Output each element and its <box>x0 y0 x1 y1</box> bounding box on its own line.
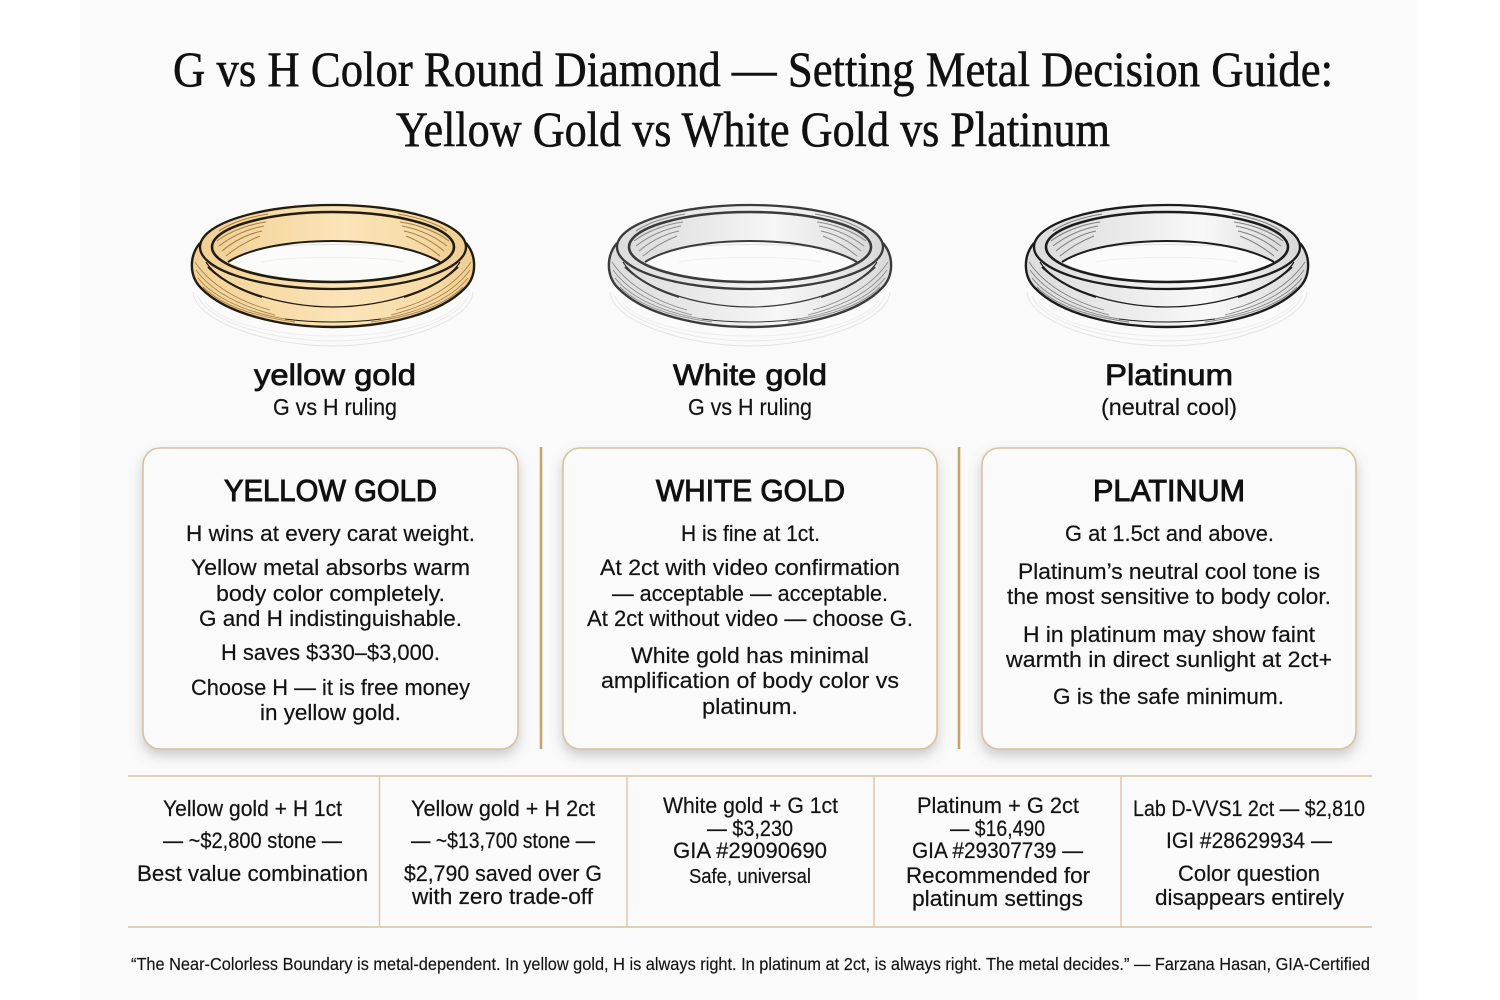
text: white gold ruling: At 2ct with video confirmation <box>600 555 900 580</box>
divider: yellow gold and white gold <box>540 447 542 749</box>
label: white gold ring: White gold <box>673 359 827 392</box>
text: white gold ruling: amplification of body color vs <box>601 668 899 693</box>
table cell: platinum G 2ct: Platinum + G 2ct <box>917 793 1079 818</box>
text: platinum ruling <box>1005 521 1332 709</box>
table cell: yellow gold H 2ct: Yellow gold + H 2ct <box>411 796 595 821</box>
table cell: white gold G 1ct: GIA #29090690 <box>673 838 827 863</box>
table cell: platinum G 2ct: — $16,490 <box>950 816 1045 841</box>
table cell: lab diamond: Lab D-VVS1 2ct — $2,810 <box>1133 796 1365 821</box>
table cell: lab diamond: Color question <box>1178 861 1320 886</box>
title: Yellow Gold vs White Gold vs Platinum <box>396 101 1110 157</box>
text: yellow gold ruling: Yellow metal absorbs warm <box>191 555 470 580</box>
text: platinum ruling: G at 1.5ct and above. <box>1065 521 1274 546</box>
text: white gold ruling: At 2ct without video — choose G. <box>587 606 913 631</box>
label: white gold ring: G vs H ruling <box>688 394 812 420</box>
table cell: yellow gold H 1ct: Best value combination <box>137 861 368 886</box>
table cell: white gold G 1ct: White gold + G 1ct <box>663 793 838 818</box>
table cell: platinum G 2ct <box>906 793 1090 911</box>
text: platinum ruling: the most sensitive to body color. <box>1007 584 1331 609</box>
table cell: yellow gold H 1ct <box>137 796 368 886</box>
divider: white gold and platinum <box>958 447 960 749</box>
text: white gold ruling: H is fine at 1ct. <box>681 521 820 546</box>
heading: yellow gold: YELLOW GOLD <box>224 473 437 508</box>
text: yellow gold ruling: in yellow gold. <box>260 700 401 725</box>
text: yellow gold ruling: H saves $330–$3,000. <box>221 640 440 665</box>
table cell: yellow gold H 2ct <box>404 796 602 909</box>
table cell: white gold G 1ct <box>663 793 838 888</box>
icon: yellow gold ring <box>192 205 474 346</box>
icon: white gold ring <box>609 205 891 346</box>
table cell: platinum G 2ct: Recommended for <box>906 863 1090 888</box>
text: platinum ruling: warmth in direct sunlight at 2ct+ <box>1005 647 1332 672</box>
text: yellow gold ruling: body color completely. <box>216 581 445 606</box>
label: white gold ring <box>673 359 827 420</box>
label: platinum ring: Platinum <box>1105 359 1233 392</box>
icon: platinum ring <box>1026 205 1308 346</box>
heading: white gold: WHITE GOLD <box>656 473 845 508</box>
label: platinum ring <box>1101 359 1237 420</box>
table cell: yellow gold H 2ct: — ~$13,700 stone — <box>411 828 595 853</box>
table cell: yellow gold H 2ct: $2,790 saved over G <box>404 861 602 886</box>
table cell: white gold G 1ct: Safe, universal <box>689 866 811 888</box>
text: platinum ruling: G is the safe minimum. <box>1053 684 1284 709</box>
table cell: lab diamond <box>1133 796 1365 910</box>
text: white gold ruling: — acceptable — acceptable. <box>612 581 888 606</box>
panel: white gold <box>563 448 937 749</box>
table cell: yellow gold H 1ct: — ~$2,800 stone — <box>163 828 342 853</box>
footer quote: “The Near-Colorless Boundary is metal-dependent. In yellow gold, H is always right. In platinum at 2ct, is always right. The metal decides.” — Farzana Hasan, GIA-Certified <box>131 954 1370 974</box>
table cell: platinum G 2ct: GIA #29307739 — <box>912 838 1083 863</box>
heading: platinum: PLATINUM <box>1093 473 1245 508</box>
text: platinum ruling: H in platinum may show faint <box>1023 622 1315 647</box>
table cell: lab diamond: disappears entirely <box>1155 885 1344 910</box>
label: yellow gold ring: yellow gold <box>254 359 416 392</box>
text: platinum ruling: Platinum’s neutral cool tone is <box>1018 559 1320 584</box>
text: white gold ruling: platinum. <box>702 694 798 719</box>
panel: platinum <box>982 448 1356 749</box>
table cell: yellow gold H 2ct: with zero trade-off <box>411 884 594 909</box>
text: yellow gold ruling <box>186 521 475 725</box>
text: white gold ruling: White gold has minimal <box>631 643 869 668</box>
title <box>173 41 1333 157</box>
text: yellow gold ruling: H wins at every carat weight. <box>186 521 475 546</box>
label: yellow gold ring: G vs H ruling <box>273 394 397 420</box>
panel: yellow gold <box>143 448 518 749</box>
text: white gold ruling <box>587 521 913 719</box>
table cell: lab diamond: IGI #28629934 — <box>1166 828 1332 853</box>
table cell: yellow gold H 1ct: Yellow gold + H 1ct <box>163 796 342 821</box>
title: G vs H Color Round Diamond — Setting Metal Decision Guide: <box>173 41 1333 97</box>
label: platinum ring: (neutral cool) <box>1101 394 1237 420</box>
text: yellow gold ruling: Choose H — it is free money <box>191 675 470 700</box>
label: yellow gold ring <box>254 359 416 420</box>
table cell: platinum G 2ct: platinum settings <box>912 886 1083 911</box>
table cell: white gold G 1ct: — $3,230 <box>707 816 793 841</box>
comparison table <box>128 776 1372 927</box>
text: yellow gold ruling: G and H indistinguishable. <box>199 606 462 631</box>
